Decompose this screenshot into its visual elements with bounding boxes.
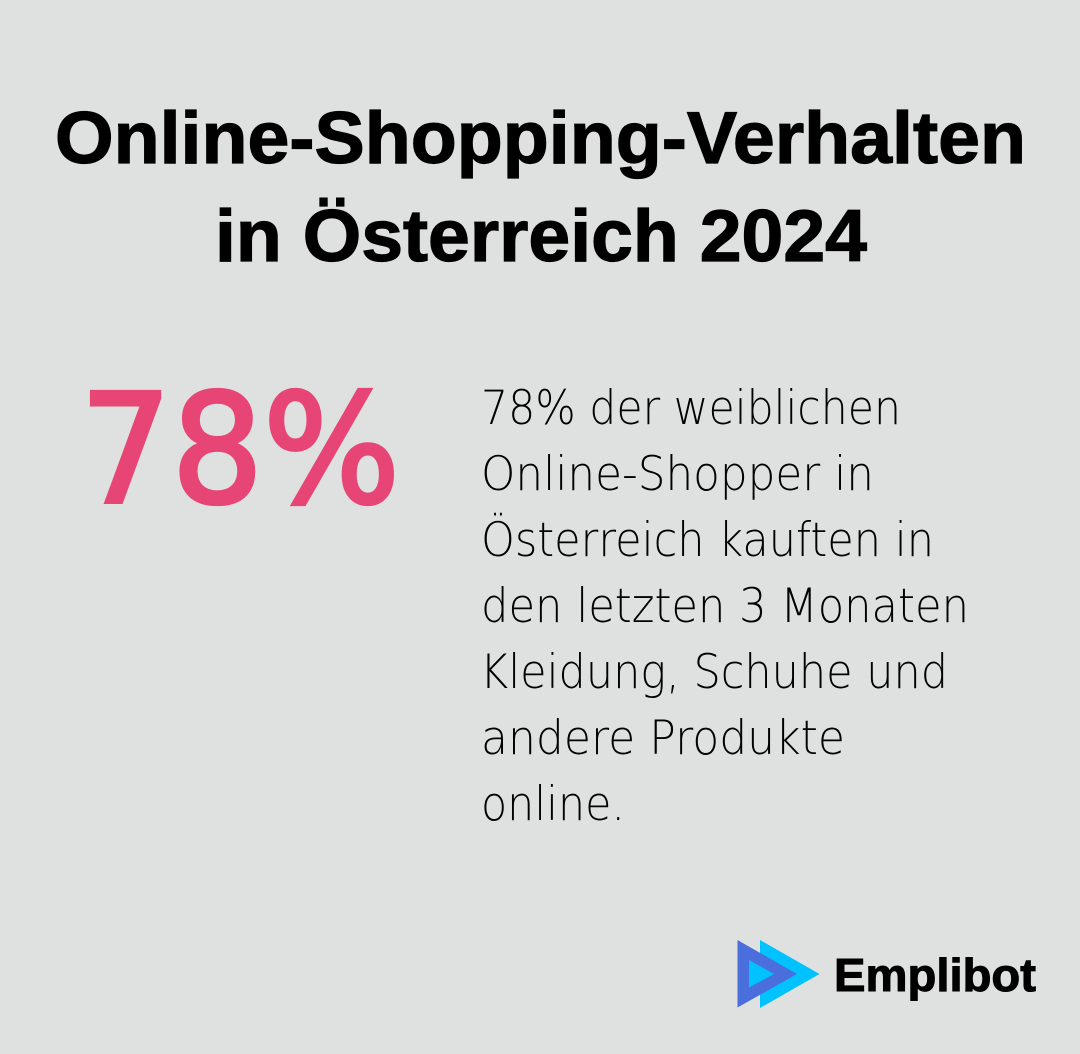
title: in Österreich 2024: [215, 196, 867, 277]
title: [55, 98, 1026, 277]
description text: andere Produkte: [481, 711, 845, 766]
big statistic: 78%: 78%: [80, 362, 400, 538]
description text: [480, 381, 969, 832]
description text: online.: [481, 777, 625, 832]
logo wordmark: Emplibot: [834, 949, 1036, 1001]
description text: 78% der weiblichen: [481, 381, 901, 436]
description text: Kleidung, Schuhe und: [480, 645, 948, 700]
description text: Österreich kauften in: [481, 513, 934, 568]
title: Online-Shopping-Verhalten: [55, 98, 1026, 179]
logo: Emplibot: [738, 940, 1036, 1008]
icon: play triangles: [738, 940, 820, 1008]
description text: den letzten 3 Monaten: [481, 579, 969, 634]
description text: Online-Shopper in: [481, 447, 874, 502]
